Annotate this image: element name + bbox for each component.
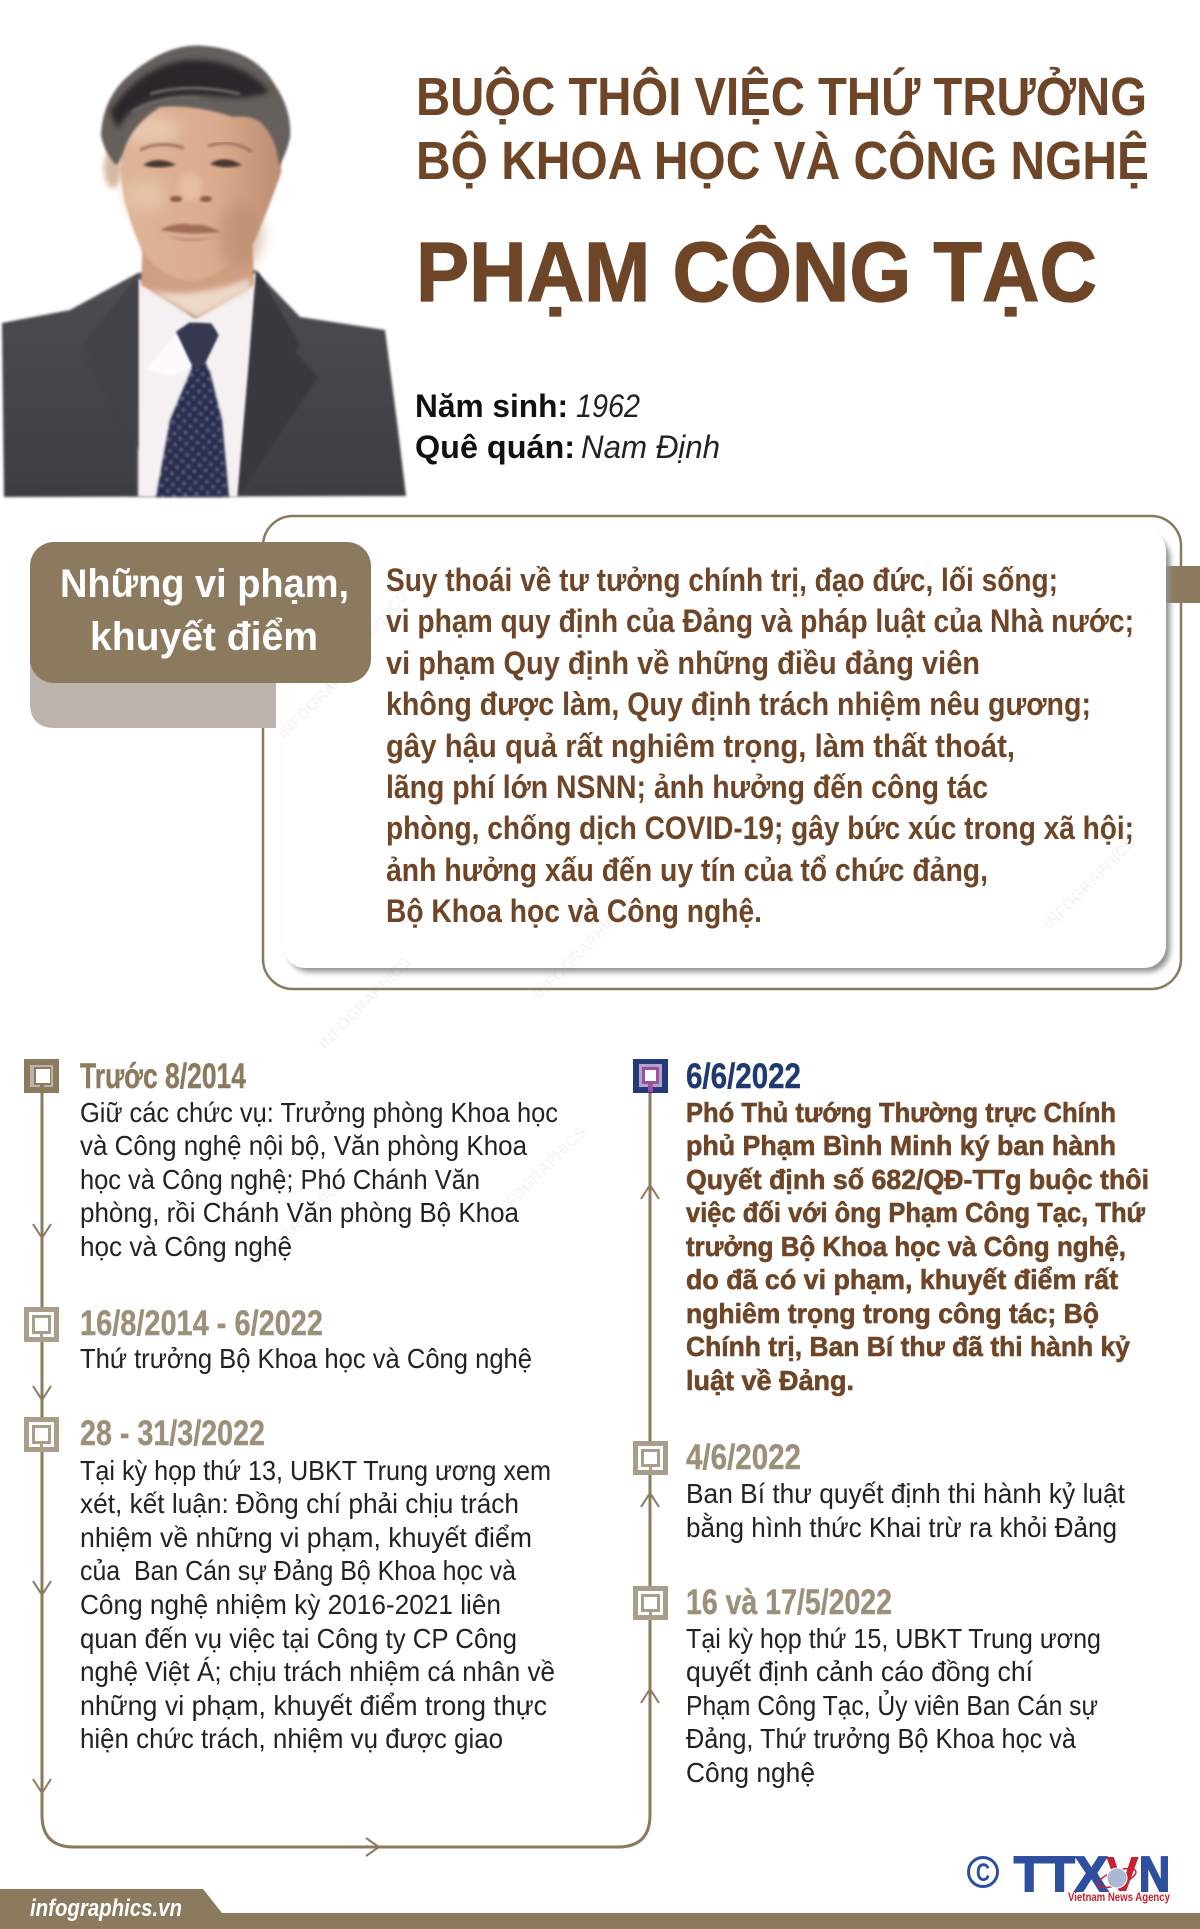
violations text: Bộ Khoa học và Công nghệ.: [386, 893, 762, 929]
event: 28 - 31/3/2022: nghệ Việt Á; chịu trách nhiệm cá nhân về: [80, 1656, 555, 1687]
event: 28 - 31/3/2022: 28 - 31/3/2022: [80, 1414, 265, 1453]
footer bar: infographics.vn: [30, 1895, 182, 1922]
event: before 8/2014: và Công nghệ nội bộ, Văn phòng Khoa: [80, 1130, 527, 1161]
violations text: Suy thoái về tư tưởng chính trị, đạo đức, lối sống;: [386, 562, 1058, 598]
violations text: ảnh hưởng xấu đến uy tín của tổ chức đảng,: [386, 852, 988, 888]
event: 4/6/2022: Ban Bí thư quyết định thi hành kỷ luật: [686, 1478, 1125, 1509]
violations text: gây hậu quả rất nghiêm trọng, làm thất thoát,: [386, 728, 1015, 764]
event: 6/6/2022: Quyết định số 682/QĐ-TTg buộc thôi: [686, 1164, 1149, 1195]
event: 6/6/2022: việc đối với ông Phạm Công Tạc, Thứ: [686, 1197, 1146, 1228]
event: 16 and 17/5/2022: 16 và 17/5/2022: [686, 1583, 892, 1622]
violations text: lãng phí lớn NSNN; ảnh hưởng đến công tác: [386, 769, 988, 805]
event: before 8/2014: học và Công nghệ: [80, 1231, 292, 1262]
event: before 8/2014: học và Công nghệ; Phó Chánh Văn: [80, 1164, 480, 1195]
event: 6/6/2022: Chính trị, Ban Bí thư đã thi hành kỷ: [686, 1331, 1130, 1362]
title: [416, 66, 1149, 191]
portrait photo: [2, 46, 406, 497]
event: 16 and 17/5/2022: quyết định cảnh cáo đồng chí: [686, 1656, 1033, 1687]
text: INFOGRAPHICS: [1041, 834, 1140, 933]
hometown: Nam Định: [581, 429, 720, 465]
panel: violations: [30, 516, 1200, 989]
hometown: [415, 429, 720, 465]
logo: TTXVN copyright: V: [1106, 1848, 1139, 1902]
event: 16 and 17/5/2022: Phạm Công Tạc, Ủy viên Ban Cán sự: [686, 1689, 1098, 1721]
event: 6/6/2022: luật về Đảng.: [686, 1365, 854, 1396]
event: 28 - 31/3/2022: [24, 1414, 555, 1754]
violations label: Những vi phạm,: [60, 562, 349, 606]
event: before 8/2014: phòng, rồi Chánh Văn phòng Bộ Khoa: [80, 1197, 519, 1228]
event: 16 and 17/5/2022: Công nghệ: [686, 1757, 815, 1788]
event: 28 - 31/3/2022: của Ban Cán sự Đảng Bộ Khoa học và: [80, 1555, 516, 1586]
text: INFOGRAPHICS: [316, 954, 415, 1053]
birth year: Năm sinh:: [415, 388, 568, 424]
text: INFOGRAPHICS: [491, 1124, 590, 1223]
marker: [633, 1586, 668, 1620]
event: 16 and 17/5/2022: Tại kỳ họp thứ 15, UBKT Trung ương: [686, 1623, 1101, 1654]
violations label: khuyết điểm: [90, 615, 318, 659]
event: 6/6/2022: nghiêm trọng trong công tác; Bộ: [686, 1298, 1099, 1329]
marker: [633, 1059, 668, 1093]
marker: [633, 1441, 668, 1475]
event: 28 - 31/3/2022: xét, kết luận: Đồng chí phải chịu trách: [80, 1488, 519, 1519]
text: INFOGRAPHICS: [251, 1174, 350, 1273]
name heading: PHẠM CÔNG TẠC: [416, 225, 1097, 319]
event: 28 - 31/3/2022: những vi phạm, khuyết điểm trong thực: [80, 1690, 547, 1721]
event: 4/6/2022: [633, 1438, 1125, 1543]
event: 28 - 31/3/2022: Công nghệ nhiệm kỳ 2016-2021 liên: [80, 1589, 501, 1620]
event: before 8/2014: [24, 1057, 558, 1262]
logo: TTXVN copyright: [968, 1848, 1170, 1904]
birth year: 1962: [576, 388, 640, 424]
event: 6/6/2022: [633, 1057, 1149, 1396]
logo: TTXVN copyright: TTX: [1014, 1848, 1108, 1902]
event: 4/6/2022: 4/6/2022: [686, 1438, 801, 1477]
event: 16/8/2014 - 6/2022: 16/8/2014 - 6/2022: [80, 1304, 323, 1343]
event: 28 - 31/3/2022: Tại kỳ họp thứ 13, UBKT Trung ương xem: [80, 1455, 551, 1486]
event: 6/6/2022: phủ Phạm Bình Minh ký ban hành: [686, 1130, 1116, 1161]
violations text: [386, 562, 1134, 929]
logo: TTXVN copyright: C: [976, 1859, 990, 1887]
event: 6/6/2022: trưởng Bộ Khoa học và Công nghệ,: [686, 1231, 1126, 1262]
event: 28 - 31/3/2022: hiện chức trách, nhiệm vụ được giao: [80, 1723, 503, 1754]
event: 4/6/2022: bằng hình thức Khai trừ ra khỏi Đảng: [686, 1512, 1117, 1543]
logo: TTXVN copyright: Vietnam News Agency: [1068, 1890, 1170, 1904]
event: 6/6/2022: Phó Thủ tướng Thường trực Chính: [686, 1097, 1116, 1128]
timeline connector line with arrows: [33, 1093, 659, 1856]
marker: [24, 1059, 59, 1093]
event: 16 and 17/5/2022: Đảng, Thứ trưởng Bộ Khoa học và: [686, 1723, 1076, 1754]
text: INFOGRAPHICS: [276, 644, 375, 743]
violations text: vi phạm Quy định về những điều đảng viên: [386, 645, 980, 681]
violations label: [30, 542, 371, 728]
event: 16/8/2014 - 6/2022: Thứ trưởng Bộ Khoa học và Công nghệ: [80, 1343, 532, 1374]
text: INFOGRAPHICS: [531, 904, 630, 1003]
logo: TTXVN copyright: N: [1139, 1848, 1170, 1902]
event: 16/8/2014 - 6/2022: [24, 1304, 532, 1374]
event: 16 and 17/5/2022: [633, 1583, 1101, 1788]
event: before 8/2014: Giữ các chức vụ: Trưởng phòng Khoa học: [80, 1097, 558, 1128]
marker: [24, 1417, 59, 1452]
violations text: không được làm, Quy định trách nhiệm nêu gương;: [386, 686, 1091, 722]
text: INFOGRAPHICS: [320, 587, 412, 693]
event: 28 - 31/3/2022: nhiệm về những vi phạm, khuyết điểm: [80, 1522, 532, 1553]
event: 28 - 31/3/2022: quan đến vụ việc tại Công ty CP Công: [80, 1623, 517, 1654]
event: before 8/2014: Trước 8/2014: [80, 1057, 246, 1096]
footer bar: [0, 1889, 1200, 1929]
marker: [24, 1307, 59, 1342]
event: 6/6/2022: do đã có vi phạm, khuyết điểm rất: [686, 1264, 1118, 1295]
hometown: Quê quán:: [415, 429, 575, 465]
event: 6/6/2022: 6/6/2022: [686, 1057, 801, 1096]
birth year: [415, 388, 640, 424]
